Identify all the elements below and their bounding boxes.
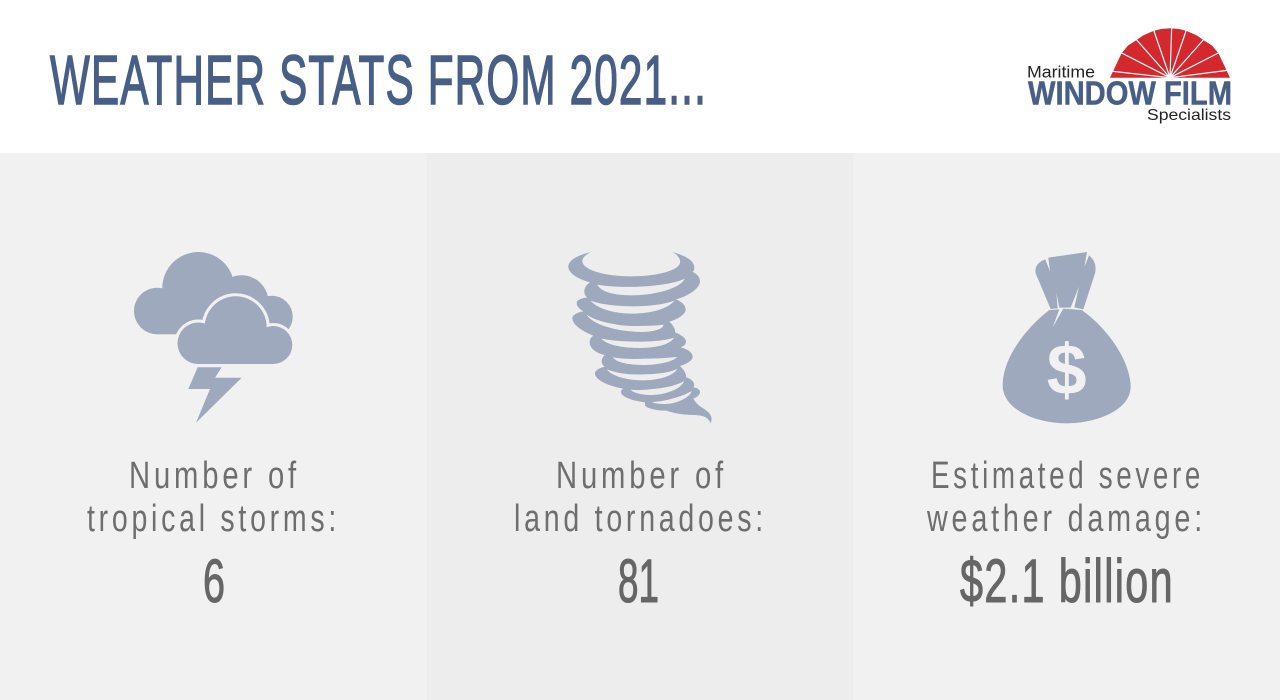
- logo fan: [1110, 27, 1230, 78]
- icon: tornado: [568, 252, 712, 423]
- logo: [1027, 27, 1232, 124]
- value: 6: [203, 547, 225, 615]
- panel: land tornadoes: [427, 153, 853, 700]
- logo text: Window Film: WINDOW FILM: [1028, 74, 1232, 111]
- bag body: [1003, 309, 1131, 423]
- front cloud: [178, 296, 292, 364]
- tornado gaps: [587, 279, 692, 404]
- label line 2: tropical storms:: [87, 498, 340, 540]
- label line 2: land tornadoes:: [514, 498, 767, 540]
- dollar sign: $: [1047, 330, 1087, 410]
- lightning bolt: [188, 367, 242, 423]
- icon: storm clouds: [134, 252, 293, 423]
- logo text: Maritime: Maritime: [1027, 64, 1095, 82]
- tornado silhouette: [568, 252, 712, 423]
- label: Number of: [129, 455, 300, 497]
- value: $2.1 billion: [960, 547, 1174, 615]
- title: WEATHER STATS FROM 2021...: [50, 41, 707, 119]
- icon: money bag: [1003, 252, 1131, 423]
- bag neck: [1035, 252, 1096, 309]
- front cloud outline: [178, 296, 292, 364]
- logo text: Specialists: Specialists: [1147, 107, 1231, 124]
- value: 81: [618, 547, 659, 615]
- panel: tropical storms: [0, 153, 427, 700]
- panel: severe weather damage: [853, 153, 1280, 700]
- label: Number of: [556, 455, 727, 497]
- back cloud: [134, 252, 293, 338]
